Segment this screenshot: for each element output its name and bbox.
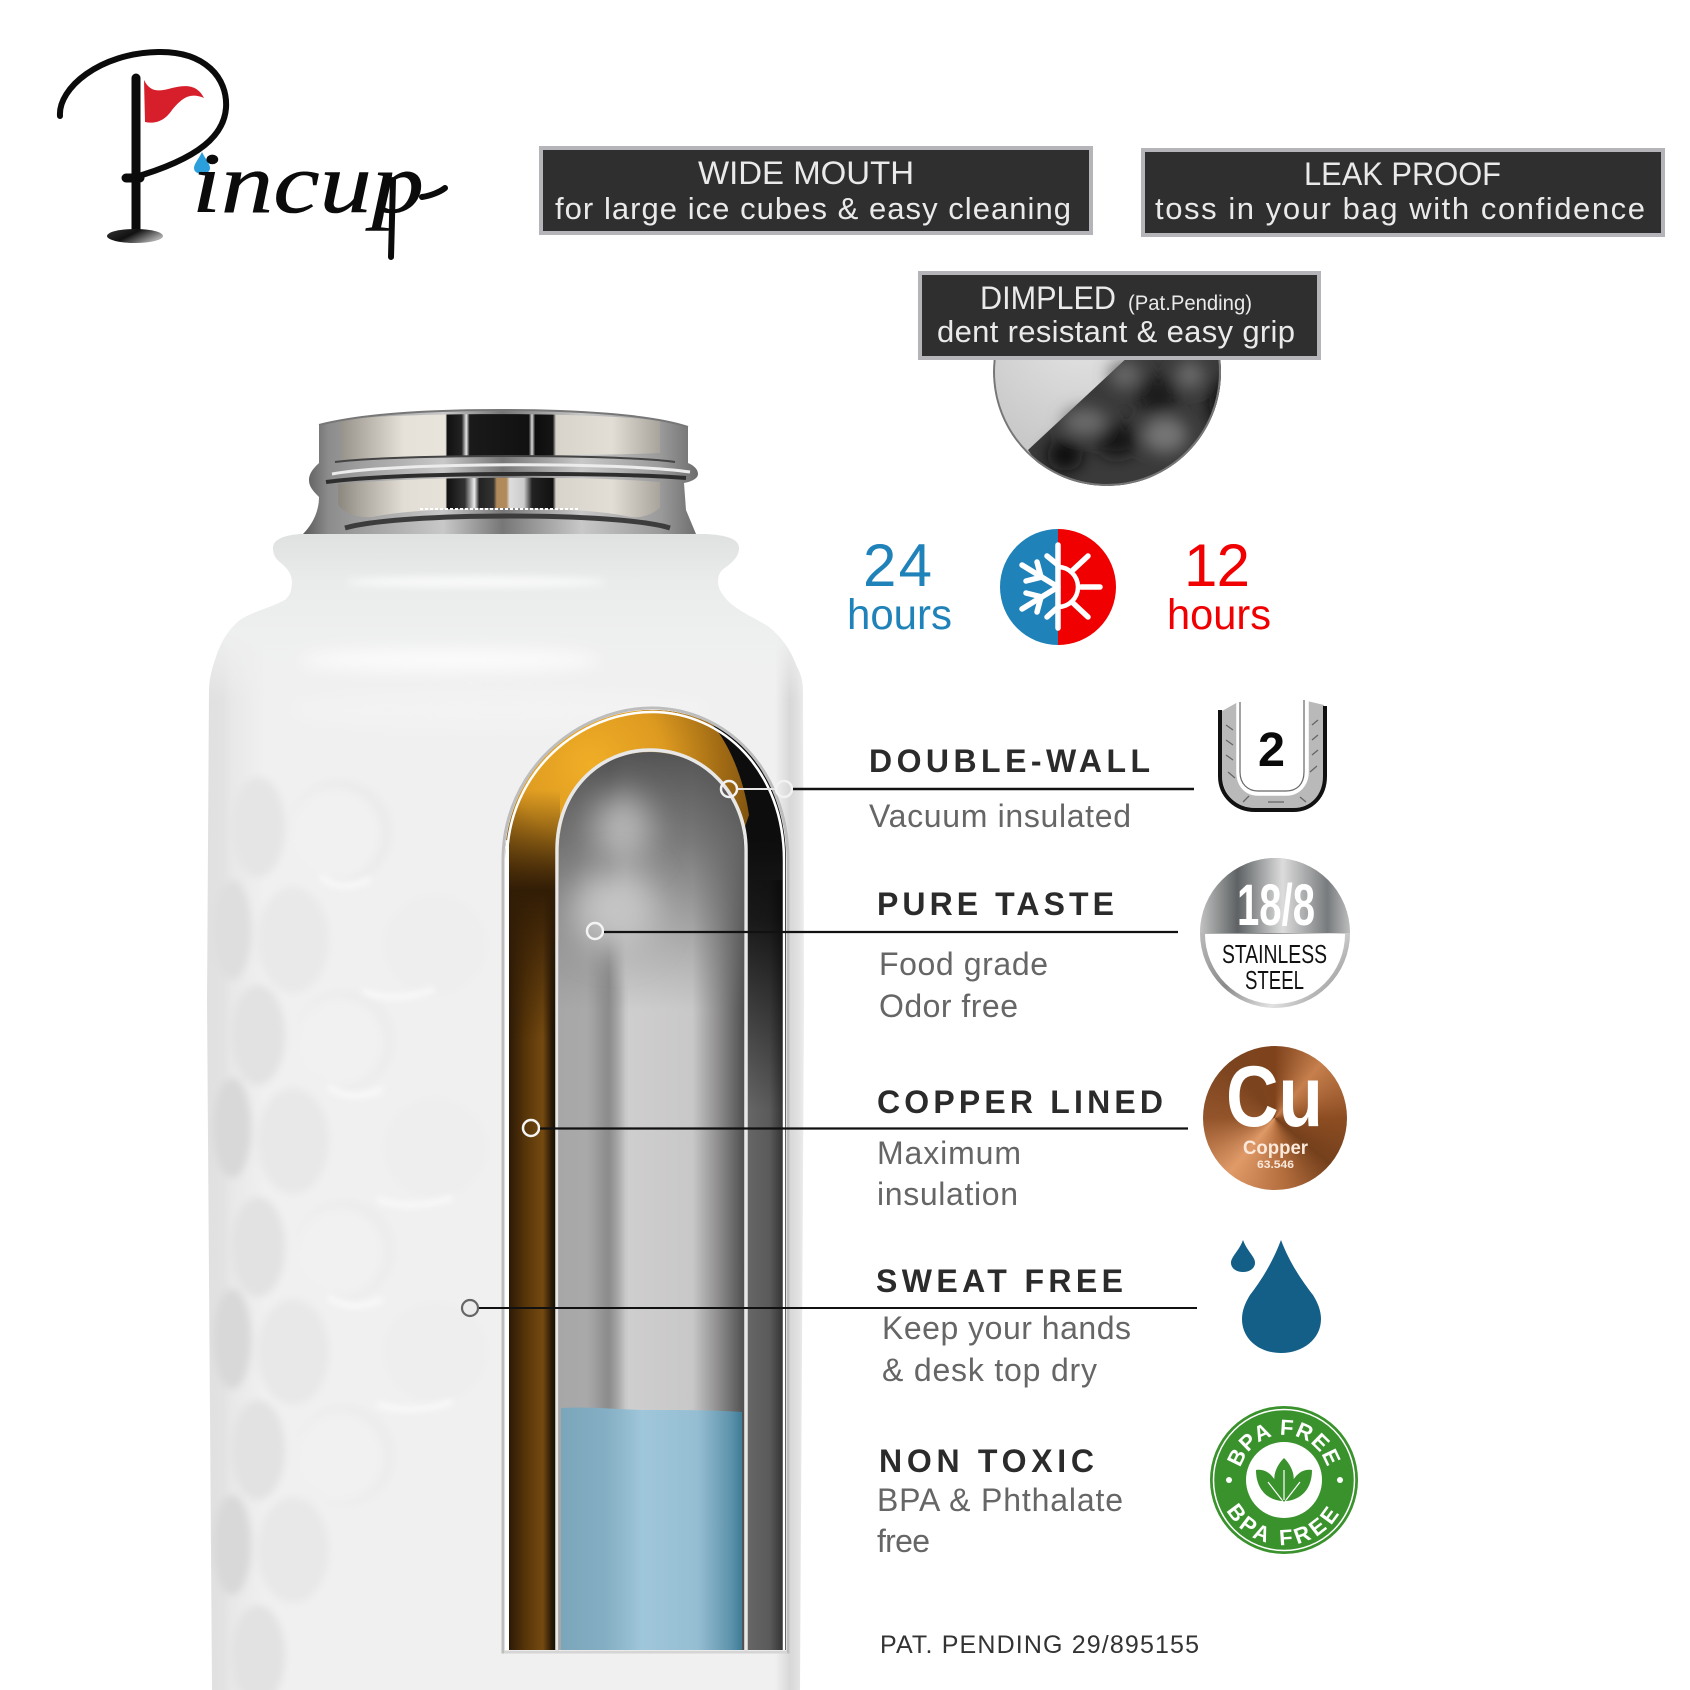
bottle: steel mouth xyxy=(303,410,698,534)
feature: double-wall xyxy=(721,743,1194,834)
feature: non toxic: NON TOXIC xyxy=(879,1443,1094,1479)
callout: dimpled: (Pat.Pending) xyxy=(1128,292,1252,315)
feature: sweat free: & desk top dry xyxy=(882,1352,1097,1388)
callout: leak proof: LEAK PROOF xyxy=(1304,156,1501,192)
icon: copper Cu badge: Cu xyxy=(1226,1049,1323,1145)
feature: pure taste: Odor free xyxy=(879,988,1018,1024)
bottle: cutaway frame xyxy=(500,700,790,1665)
icon: copper Cu badge: Copper xyxy=(1243,1138,1309,1159)
feature: pure taste: PURE TASTE xyxy=(877,886,1114,922)
feature: pure taste xyxy=(587,886,1178,1024)
feature: non toxic: BPA & Phthalate xyxy=(877,1482,1123,1518)
logo: water drop xyxy=(194,152,210,174)
bottle: inner steel tube xyxy=(555,745,750,1665)
icon: BPA free badge: BPA FREE xyxy=(1226,1502,1340,1546)
feature: copper lined: Maximum xyxy=(877,1135,1021,1171)
leader line: double-wall xyxy=(721,781,1194,797)
icon: 18/8 stainless steel badge: STEEL xyxy=(1245,965,1304,995)
feature: non toxic xyxy=(877,1443,1123,1559)
icon: water drops xyxy=(1231,1240,1321,1353)
icon: leaf xyxy=(1256,1458,1312,1502)
stat: 24 hours cold: hours xyxy=(847,591,952,639)
icon: double wall cross-section: 2 xyxy=(1258,724,1285,777)
stat: 12 hours hot: 12 xyxy=(1184,532,1250,599)
callout: wide mouth: for large ice cubes & easy cleaning xyxy=(555,191,1071,226)
icon: copper Cu badge: 63.546 xyxy=(1257,1159,1294,1171)
leader line: sweat free xyxy=(462,1300,1197,1316)
icon: double wall cross-section xyxy=(1220,700,1325,810)
callout: leak proof xyxy=(1143,150,1663,235)
callout: dimpled: dent resistant & easy grip xyxy=(937,314,1295,349)
logo: golf hole xyxy=(107,229,163,243)
feature: double-wall: DOUBLE-WALL xyxy=(869,743,1150,779)
leader line: pure taste xyxy=(587,923,1178,939)
callout: wide mouth xyxy=(541,148,1091,233)
stat: 24 hours cold: 24 xyxy=(863,532,932,599)
icon: 18/8 stainless steel badge: STAINLESS xyxy=(1222,939,1327,969)
icon: dimple surface disc xyxy=(993,360,1221,486)
feature: sweat free xyxy=(462,1263,1197,1388)
callout: dimpled: DIMPLED xyxy=(980,280,1116,316)
feature: copper lined: insulation xyxy=(877,1176,1018,1212)
stat: 24 hours cold xyxy=(847,532,952,639)
logo: red flag xyxy=(144,80,204,123)
bottle: white dimpled body xyxy=(200,525,820,1690)
logo: incup wordmark: incup xyxy=(192,135,424,231)
leader line: copper lined xyxy=(523,1120,1188,1136)
bottle xyxy=(200,410,820,1690)
bottle: copper lining xyxy=(500,708,749,1660)
logo: Pincup xyxy=(60,52,445,257)
logo: P swoosh xyxy=(60,52,226,178)
icon: BPA free badge xyxy=(1210,1406,1358,1554)
icon: BPA free badge: BPA FREE xyxy=(1227,1420,1341,1466)
feature: double-wall: Vacuum insulated xyxy=(869,798,1131,834)
feature: copper lined: COPPER LINED xyxy=(877,1084,1163,1120)
bottle: water level xyxy=(561,1407,742,1650)
feature: non toxic: free xyxy=(877,1523,930,1559)
callout: leak proof: toss in your bag with confidence xyxy=(1155,191,1645,226)
logo: golf flag pole xyxy=(126,78,140,236)
footnote: patent pending: PAT. PENDING 29/895155 xyxy=(880,1631,1199,1659)
feature: copper lined xyxy=(523,1084,1188,1212)
stat: 12 hours hot xyxy=(1167,532,1271,639)
icon: 18/8 stainless steel badge: 18/8 xyxy=(1237,873,1315,938)
feature: pure taste: Food grade xyxy=(879,946,1048,982)
icon: 18/8 stainless steel badge xyxy=(1200,858,1350,1008)
bottle: outer right wall xyxy=(640,700,790,1660)
feature: sweat free: SWEAT FREE xyxy=(876,1263,1123,1299)
icon: cold and hot xyxy=(1000,529,1116,645)
icon: copper Cu badge xyxy=(1203,1046,1347,1190)
feature: sweat free: Keep your hands xyxy=(882,1310,1131,1346)
callout: dimpled xyxy=(920,273,1319,358)
callout: wide mouth: WIDE MOUTH xyxy=(698,155,914,191)
stat: 12 hours hot: hours xyxy=(1167,591,1271,639)
logo: incup wordmark xyxy=(192,135,445,257)
